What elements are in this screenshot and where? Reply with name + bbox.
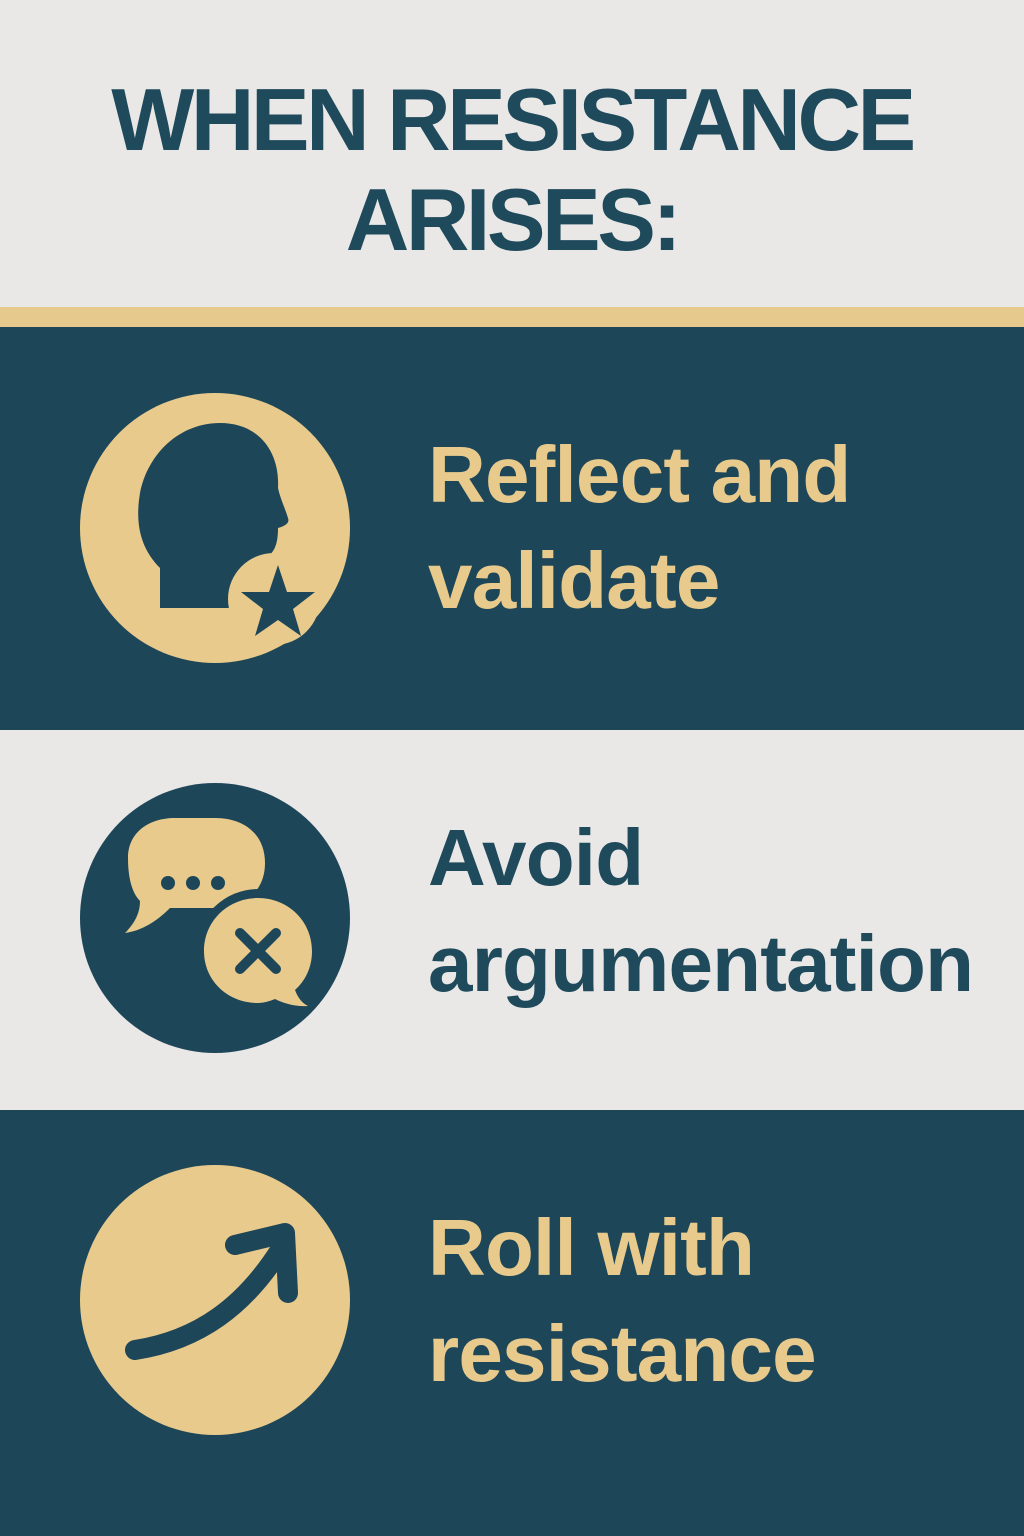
text: roll with resistance (428, 1203, 816, 1398)
panel: reflect and validate (0, 327, 1024, 730)
text: reflect and validate: validate (428, 536, 720, 625)
text: avoid argumentation: argumentation (428, 919, 973, 1008)
title: WHEN RESISTANCE (111, 70, 913, 169)
title (111, 70, 913, 269)
text: reflect and validate (428, 430, 850, 625)
panel: avoid argumentation (80, 783, 973, 1053)
text: roll with resistance: Roll with (428, 1203, 754, 1292)
text: roll with resistance: resistance (428, 1309, 816, 1398)
text: avoid argumentation: Avoid (428, 813, 643, 902)
text: avoid argumentation (428, 813, 973, 1008)
icon: curved arrow (80, 1165, 350, 1435)
gold stripe (0, 307, 1024, 327)
icon: speech bubbles with x (80, 783, 350, 1053)
icon: head with star (80, 393, 350, 663)
panel: roll with resistance (0, 1110, 1024, 1536)
text: reflect and validate: Reflect and (428, 430, 850, 519)
title: ARISES: (346, 170, 678, 269)
